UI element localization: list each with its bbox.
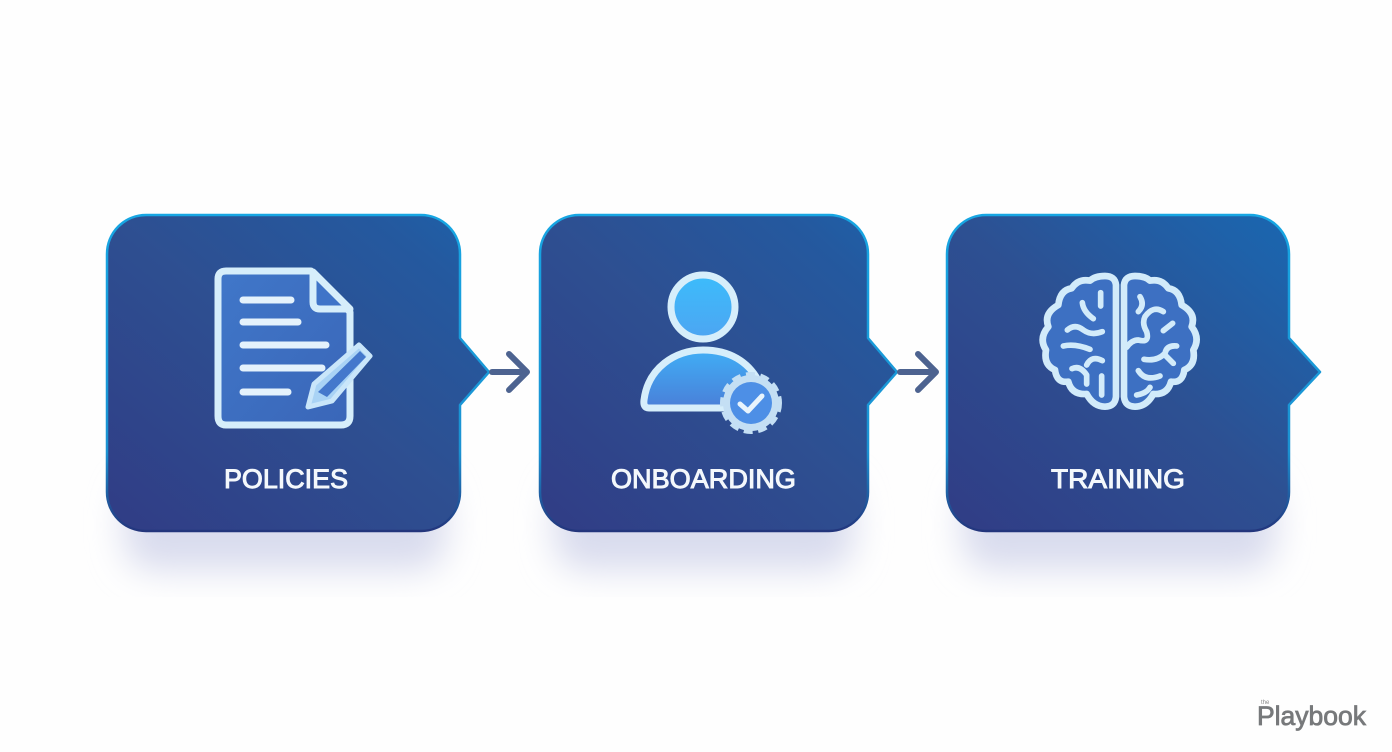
card body: onboarding [540, 215, 897, 531]
label: policies: POLICIES [224, 464, 348, 494]
arrow: onboarding to training [900, 354, 936, 390]
arrow: policies to onboarding [492, 354, 527, 390]
logo: Playbook watermark: Playbook [1257, 701, 1366, 731]
label: training: TRAINING [1051, 464, 1185, 494]
card body: training [947, 215, 1320, 531]
panel: onboarding [540, 215, 897, 531]
icon: person with check badge [644, 275, 780, 432]
icon: document with pencil [218, 271, 370, 425]
panel: training [947, 215, 1320, 531]
label: onboarding: ONBOARDING [611, 464, 796, 494]
icon: brain [1043, 276, 1197, 407]
card shadows [124, 480, 1276, 570]
panel: policies [107, 215, 489, 531]
card body: policies [107, 215, 489, 531]
logo: Playbook watermark: the [1261, 700, 1270, 706]
